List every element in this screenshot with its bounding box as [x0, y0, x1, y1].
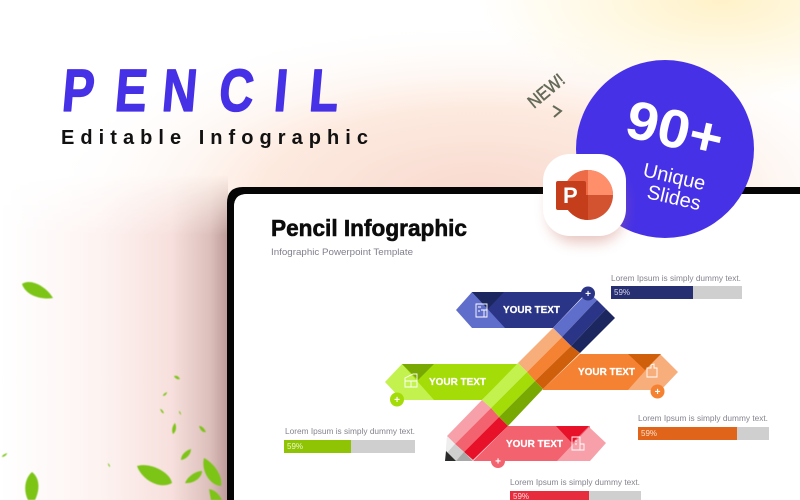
pencil orange section — [518, 328, 580, 389]
ribbon label green: YOUR TEXT — [429, 376, 487, 388]
plus marker green: + — [394, 395, 400, 406]
ribbon: pink — [473, 426, 606, 461]
progress: green: 59% — [287, 442, 303, 451]
progress: red: Lorem Ipsum is simply dummy text. — [510, 478, 640, 487]
badge: 90+ unique slides: Slides — [645, 181, 703, 215]
ribbon: navy — [456, 292, 587, 328]
badge: 90+ unique slides: Unique — [641, 159, 708, 195]
icon pink — [572, 437, 584, 450]
progress: navy: 59% — [614, 288, 630, 297]
slide subtitle: Infographic Powerpoint Template — [271, 247, 413, 258]
powerpoint icon: P — [563, 183, 578, 208]
pencil tip — [445, 436, 473, 461]
plus marker pink — [491, 454, 505, 468]
progress: red — [510, 478, 641, 500]
badge: 90+ unique slides — [576, 60, 754, 238]
progress: orange: Lorem Ipsum is simply dummy text. — [638, 414, 768, 423]
ribbon label pink: YOUR TEXT — [506, 438, 564, 450]
ribbon: green — [385, 364, 518, 400]
ribbon: orange — [543, 354, 678, 390]
subtitle: Editable Infographic — [61, 127, 368, 149]
plus marker orange — [650, 384, 664, 398]
pencil green section — [482, 363, 543, 426]
ribbon label orange: YOUR TEXT — [578, 366, 636, 378]
monitor frame — [227, 187, 800, 500]
pencil navy section — [553, 292, 615, 353]
icon green — [405, 374, 417, 387]
leaves — [2, 282, 222, 500]
plus marker navy — [581, 286, 595, 300]
pencil pink section — [447, 400, 508, 460]
plus marker orange: + — [655, 387, 661, 398]
progress: green — [284, 427, 415, 453]
progress: orange — [638, 414, 769, 440]
new label: NEW! — [524, 70, 569, 112]
pencil — [445, 292, 615, 461]
progress: navy: Lorem Ipsum is simply dummy text. — [611, 274, 741, 283]
slide title: Pencil Infographic — [271, 215, 467, 241]
powerpoint icon — [543, 154, 626, 242]
ribbon label navy: YOUR TEXT — [503, 304, 561, 316]
progress: navy — [611, 274, 742, 299]
progress: green: Lorem Ipsum is simply dummy text. — [285, 427, 415, 436]
plus marker navy: + — [585, 289, 591, 300]
icon orange — [647, 364, 657, 377]
badge: 90+ unique slides: 90+ — [620, 89, 729, 170]
icon navy — [476, 304, 487, 317]
title: PENCIL: PENCIL — [60, 57, 342, 124]
plus marker pink: + — [495, 456, 501, 468]
progress: orange: 59% — [641, 429, 657, 438]
plus marker green — [390, 392, 404, 406]
